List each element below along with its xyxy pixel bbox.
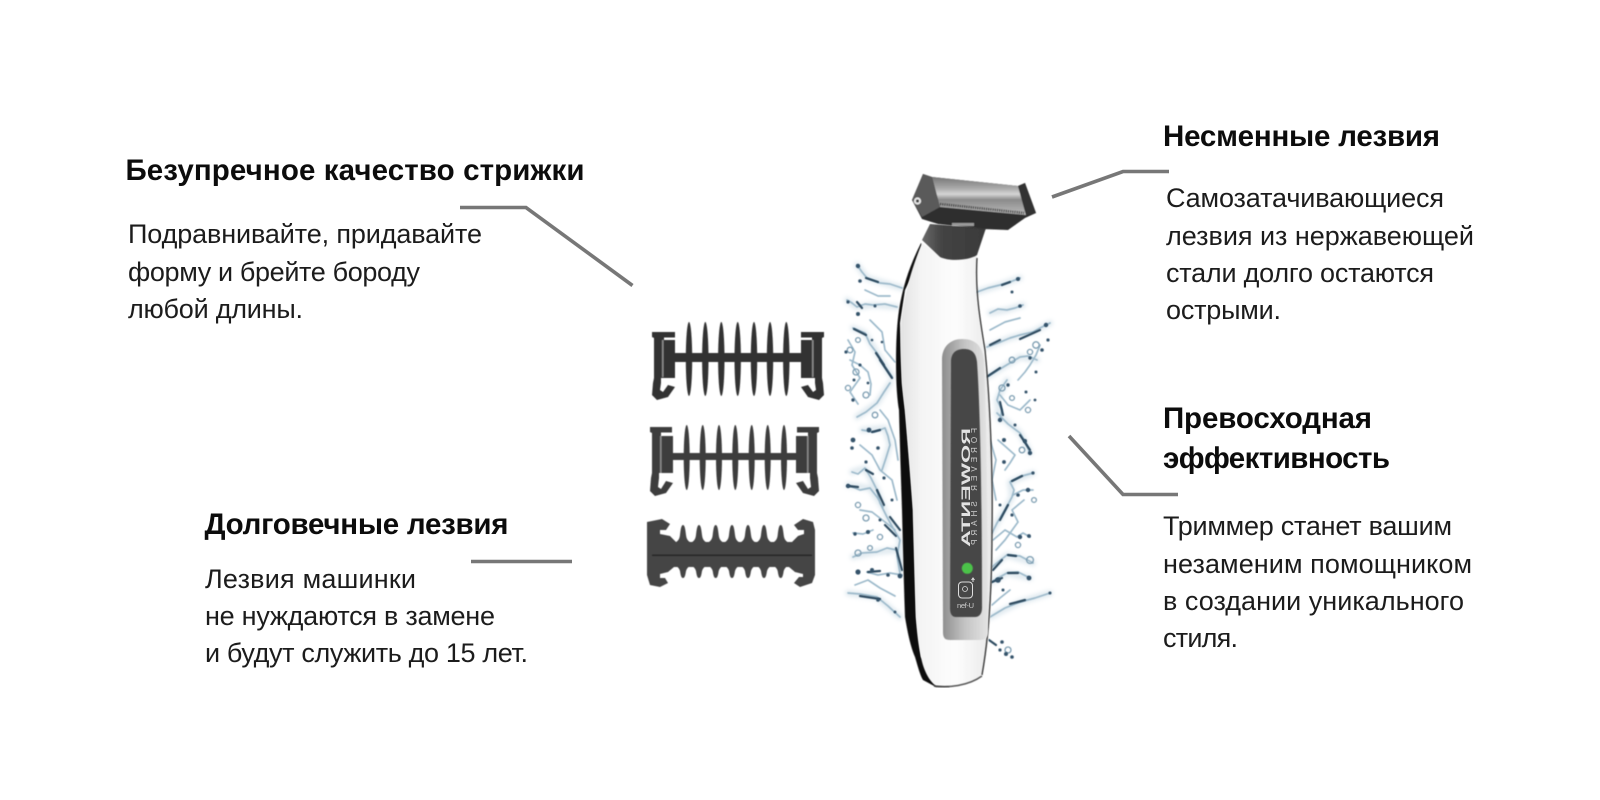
splash: soft haze — [847, 265, 1050, 617]
trimmer: neck — [922, 224, 986, 260]
leader line: permanent blades — [1052, 172, 1169, 197]
text block: superior efficiency description: незаменим помощником — [1163, 549, 1472, 579]
callout: superior efficiency — [1069, 402, 1472, 653]
text block: superior efficiency description: в создании уникального — [1163, 586, 1464, 616]
heading: permanent blades: Несменные лезвия — [1163, 120, 1440, 153]
splash: light streams — [847, 265, 1050, 617]
text block: superior efficiency description: Триммер станет вашим — [1163, 511, 1452, 541]
trimmer: control panel — [942, 339, 988, 640]
leader line: quality — [460, 208, 632, 286]
leader line: durable blades — [471, 560, 572, 563]
text block: durable blades description — [205, 564, 528, 668]
icon: green status light — [962, 563, 973, 574]
text block: flawless quality description: форму и брейте бороду — [128, 257, 420, 287]
heading: superior efficiency: Превосходная — [1163, 402, 1372, 435]
callout: flawless trimming quality — [126, 154, 632, 324]
trimmer: dark right edge — [977, 258, 992, 675]
comb attachment: middle — [650, 425, 819, 496]
text block: durable blades description: Лезвия машинки — [205, 564, 416, 594]
splash: droplets — [844, 264, 1052, 659]
text block: permanent blades description: Самозатачивающиеся — [1166, 183, 1444, 213]
text block: superior efficiency description: стиля. — [1163, 623, 1238, 653]
text block: flawless quality description: любой длины. — [128, 294, 303, 324]
text block: durable blades description: не нуждаются в замене — [205, 601, 495, 631]
icon: charge indicator — [958, 578, 974, 598]
heading: superior efficiency: эффективность — [1163, 442, 1390, 475]
text block: durable blades description: и будут служить до 15 лет. — [205, 638, 528, 668]
trimmer: white handle body — [901, 243, 992, 686]
heading: durable blades: Долговечные лезвия — [204, 508, 508, 541]
callout: permanent blades — [1052, 120, 1474, 325]
water splash — [844, 264, 1052, 659]
panel: dark control strip — [950, 349, 982, 617]
panel: model text: FOREVER SHARP — [970, 428, 979, 545]
trimmer — [896, 174, 1036, 687]
text block: flawless quality description — [128, 219, 482, 324]
trimmer: black side edge — [896, 243, 950, 687]
text block: permanent blades description: стали долго остаются — [1166, 258, 1434, 288]
trimmer: shaving head — [912, 174, 1036, 230]
text block: flawless quality description: Подравнивайте, придавайте — [128, 219, 482, 249]
panel: silver frame — [942, 339, 988, 640]
comb attachment: top — [652, 322, 824, 400]
callout: durable blades — [204, 508, 572, 668]
panel: battery label: nef-U — [957, 601, 974, 610]
text block: superior efficiency description — [1163, 511, 1472, 653]
leader line: efficiency — [1069, 436, 1178, 494]
panel: brand text: ROWENTA — [959, 428, 973, 548]
text block: permanent blades description: острыми. — [1166, 295, 1281, 325]
heading: flawless quality: Безупречное качество стрижки — [126, 154, 584, 187]
text block: permanent blades description — [1166, 183, 1474, 325]
text block: permanent blades description: лезвия из нержавеющей — [1166, 221, 1474, 251]
splash: dark streaks — [848, 278, 1040, 645]
comb attachment: bottom — [647, 519, 815, 587]
heading: superior efficiency — [1163, 402, 1390, 475]
splash: droplet rings — [845, 338, 1039, 653]
